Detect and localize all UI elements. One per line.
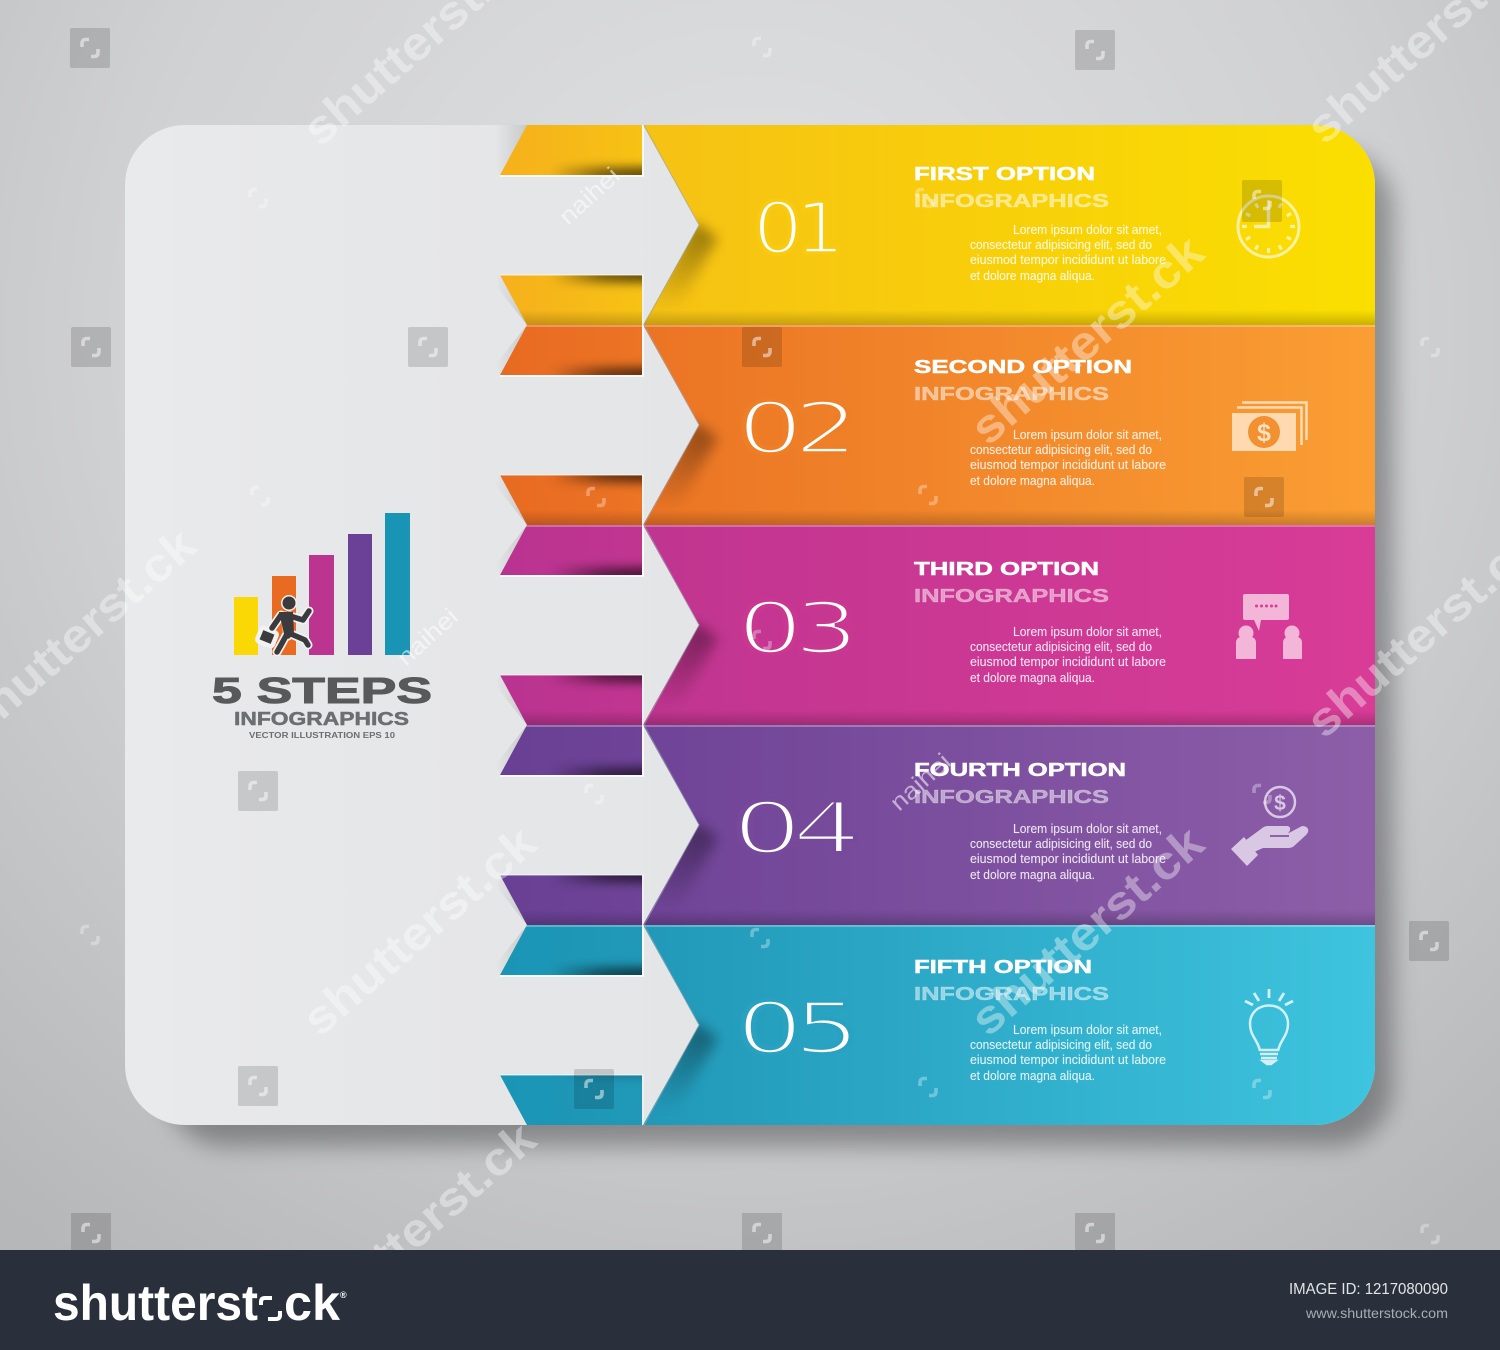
footer bar: [0, 1250, 1500, 1350]
number 02: 02: [737, 387, 850, 470]
number 04: 04: [732, 787, 857, 870]
icon: hand with coin: [1231, 787, 1308, 866]
card shadow: [165, 150, 1393, 1146]
text block: first option: consectetur adipisicing elit, sed do: [970, 238, 1152, 252]
runner figure: [260, 595, 309, 652]
website: www.shutterstock.com: [1305, 1305, 1448, 1321]
text block: second option: et dolore magna aliqua.: [970, 474, 1095, 488]
text block: third option: [914, 559, 1166, 685]
shutterstock logo: ®: [340, 1290, 347, 1300]
text block: second option: consectetur adipisicing elit, sed do: [970, 443, 1152, 457]
text block: fourth option: Lorem ipsum dolor sit amet,: [1013, 822, 1162, 836]
subheading: infographics: INFOGRAPHICS: [234, 709, 409, 729]
step 3 band: [495, 525, 1375, 775]
watermarks: naihei: [554, 162, 626, 230]
text block: first option: et dolore magna aliqua.: [970, 269, 1095, 283]
icon: people talking: [1236, 594, 1302, 659]
number 03: 03: [737, 587, 852, 670]
text block: third option: et dolore magna aliqua.: [970, 671, 1095, 685]
text block: fifth option: consectetur adipisicing elit, sed do: [970, 1038, 1152, 1052]
text block: fourth option: eiusmod tempor incididunt ut labore: [970, 852, 1166, 866]
icon: clock: [1238, 196, 1299, 257]
image id: IMAGE ID: 1217080090: [1289, 1281, 1448, 1298]
text block: third option: THIRD OPTION: [914, 559, 1099, 579]
text block: second option: Lorem ipsum dolor sit amet,: [1013, 428, 1162, 442]
text block: third option: eiusmod tempor incididunt ut labore: [970, 655, 1166, 669]
number 01: 01: [753, 187, 838, 270]
text block: fifth option: [914, 957, 1166, 1083]
watermarks: naihei: [392, 603, 464, 671]
text block: fifth option: FIFTH OPTION: [914, 957, 1092, 977]
text block: first option: FIRST OPTION: [914, 164, 1095, 184]
step 5 band: [500, 925, 1375, 1125]
text block: fourth option: consectetur adipisicing elit, sed do: [970, 837, 1152, 851]
text block: fifth option: et dolore magna aliqua.: [970, 1069, 1095, 1083]
step 4 band: [495, 725, 1375, 975]
watermarks: shutterst.ck: [292, 1111, 546, 1342]
text block: fifth option: Lorem ipsum dolor sit amet,: [1013, 1023, 1162, 1037]
number 05: 05: [736, 987, 851, 1070]
watermarks: shutterst.ck: [960, 224, 1214, 455]
text block: second option: SECOND OPTION: [914, 357, 1132, 377]
text block: fourth option: [914, 760, 1166, 882]
text block: fifth option: eiusmod tempor incididunt ut labore: [970, 1053, 1166, 1067]
panel: infographic card: [125, 125, 1375, 1125]
text block: fifth option: INFOGRAPHICS: [914, 984, 1109, 1004]
text block: fourth option: FOURTH OPTION: [914, 760, 1126, 780]
step 2 band: [495, 325, 1375, 575]
text block: fourth option: INFOGRAPHICS: [914, 787, 1109, 807]
text block: third option: INFOGRAPHICS: [914, 586, 1109, 606]
watermarks: naihei: [885, 748, 957, 816]
icon: money: [1232, 402, 1306, 451]
text block: second option: eiusmod tempor incididunt ut labore: [970, 458, 1166, 472]
heading: 5 steps: 5 STEPS: [212, 670, 432, 711]
icon: light bulb: [1245, 989, 1293, 1064]
text block: second option: INFOGRAPHICS: [914, 384, 1109, 404]
top notch shadow: [504, 125, 527, 166]
text block: third option: Lorem ipsum dolor sit amet,: [1013, 625, 1162, 639]
shutterstock logo: ck: [284, 1275, 340, 1331]
text block: fourth option: et dolore magna aliqua.: [970, 868, 1095, 882]
text block: second option: [914, 357, 1166, 488]
watermarks: shutterst.ck: [960, 815, 1214, 1046]
text block: first option: [914, 164, 1166, 283]
text block: first option: Lorem ipsum dolor sit amet,: [1013, 223, 1162, 237]
bar chart icon with runner: [234, 513, 410, 655]
text block: first option: eiusmod tempor incididunt ut labore: [970, 253, 1166, 267]
caption: vector illustration: VECTOR ILLUSTRATION EPS 10: [249, 731, 396, 740]
text block: first option: INFOGRAPHICS: [914, 191, 1109, 211]
icon: hand with coin: $: [1274, 792, 1286, 815]
icon: money: $: [1257, 419, 1271, 447]
shutterstock logo: shutterst: [53, 1275, 258, 1331]
watermarks: shutterst.ck: [292, 815, 546, 1046]
text block: third option: consectetur adipisicing elit, sed do: [970, 640, 1152, 654]
step 1 band: [495, 125, 1375, 375]
